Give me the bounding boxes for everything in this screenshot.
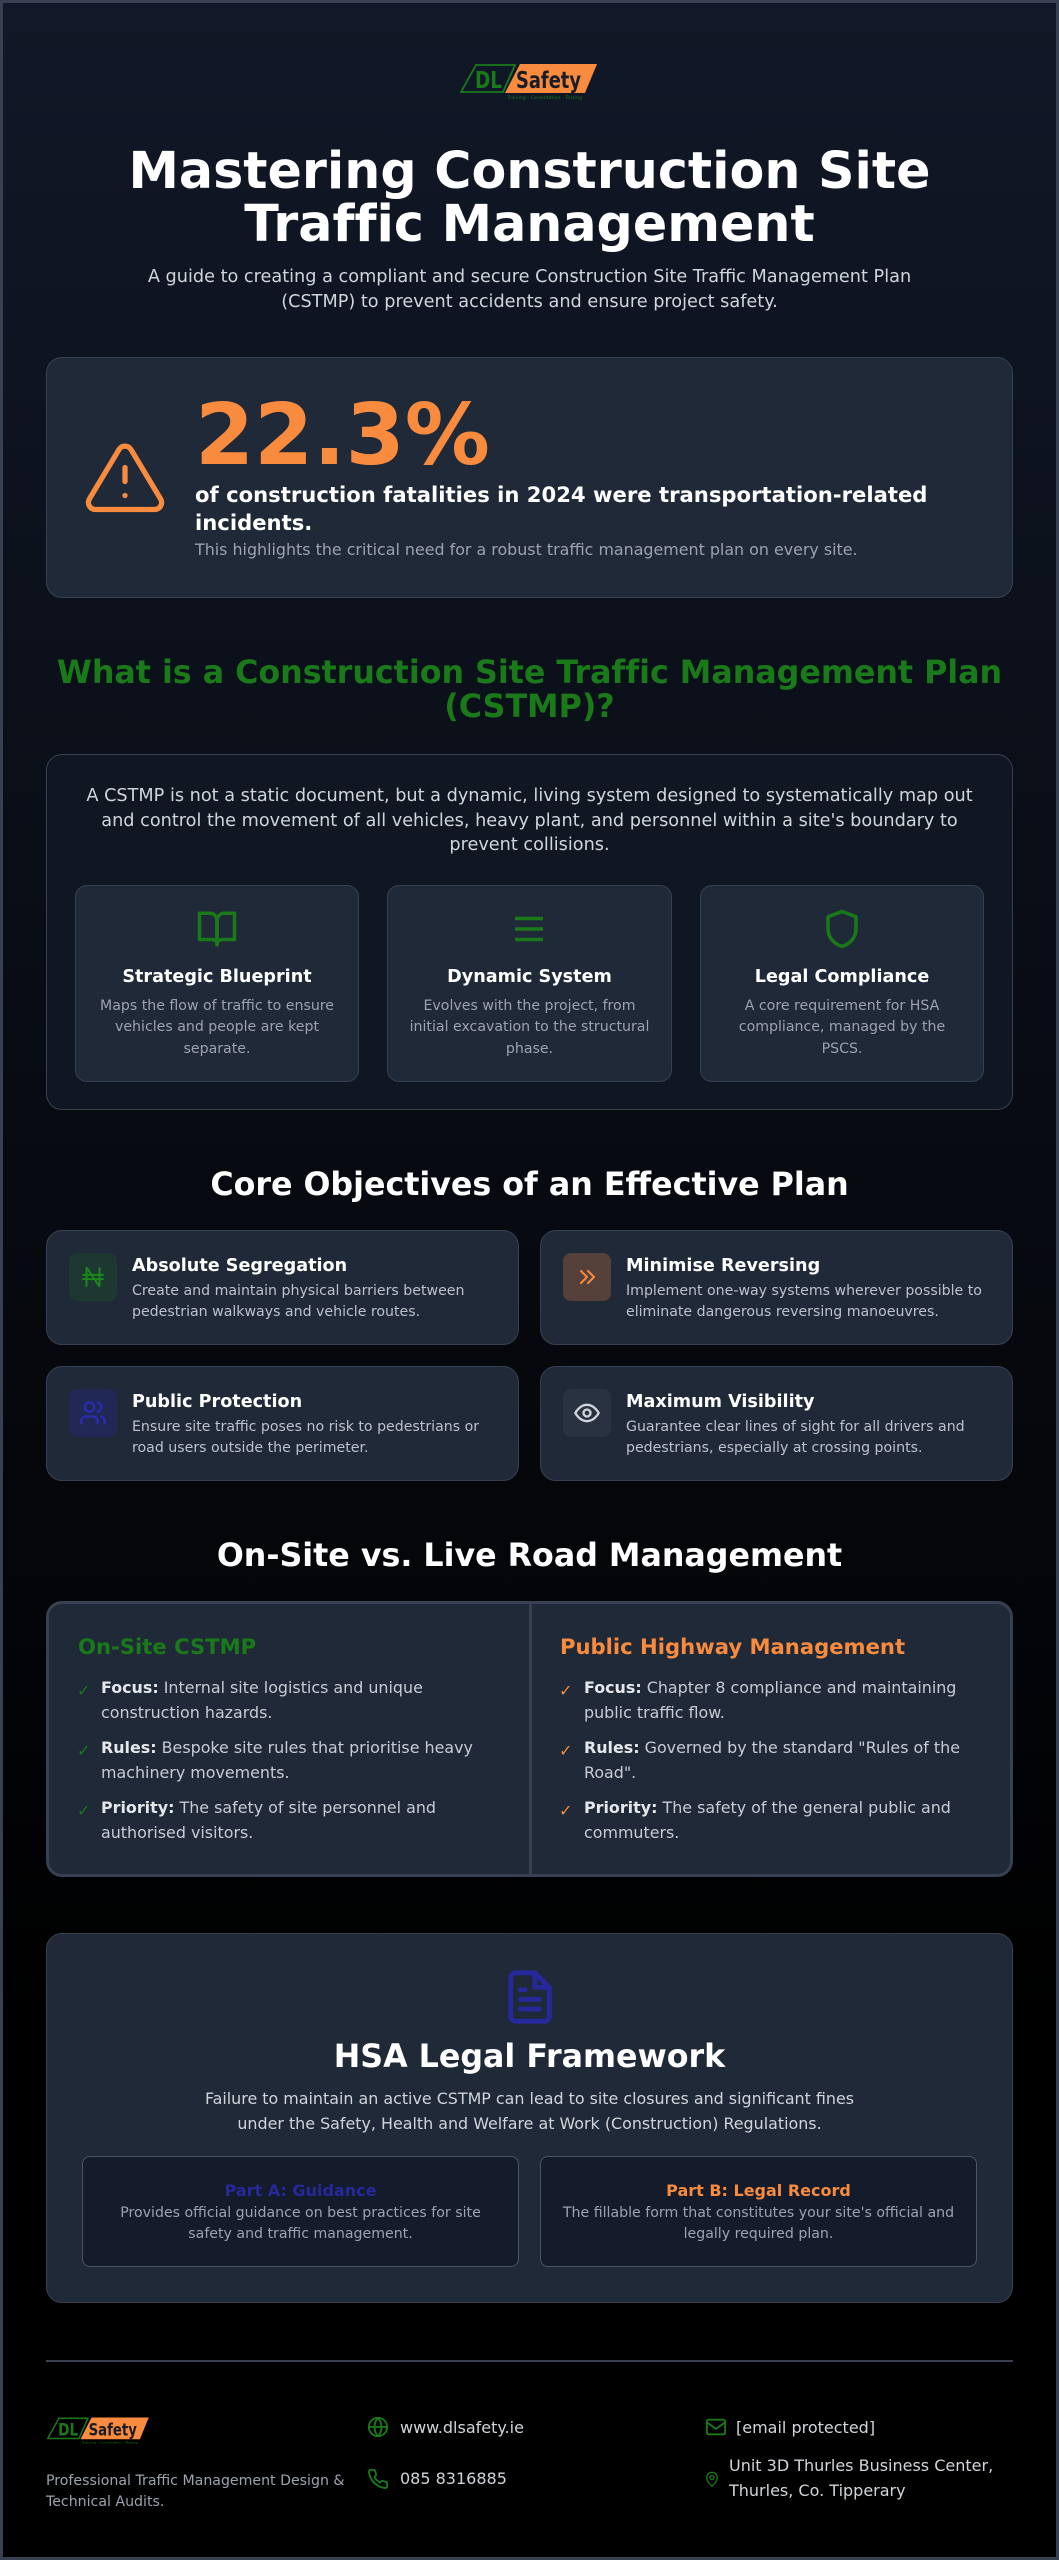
title: Part A: Guidance — [225, 2181, 376, 2200]
heading: HSA Legal Framework — [334, 2039, 725, 2075]
description — [626, 1283, 982, 1320]
list item: focus: public traffic flow. — [584, 1703, 725, 1722]
description: initial excavation to the structural — [410, 1019, 649, 1035]
check: ✓ — [77, 1801, 90, 1820]
list item: focus — [101, 1678, 423, 1722]
definition text: and control the movement of all vehicles, heavy plant, and personnel within a site's boundary to — [101, 811, 958, 831]
description: safety and traffic management. — [188, 2226, 413, 2242]
footer tagline — [46, 2473, 344, 2510]
icon: globe — [368, 2416, 388, 2438]
column divider — [529, 1604, 532, 1874]
icon: lines — [515, 916, 543, 942]
text: Failure to maintain an active CSTMP can lead to site closures and significant fines — [205, 2089, 854, 2108]
list item: rules: machinery movements. — [101, 1763, 290, 1782]
card: strategic blueprint — [75, 885, 359, 1082]
heading: what is a CSTMP — [57, 655, 1002, 725]
logo: footer: Safety — [89, 2420, 137, 2441]
description — [132, 1283, 464, 1320]
list item: rules: Rules: Governed by the standard "Rules of the — [584, 1738, 960, 1757]
description — [120, 2205, 481, 2242]
description: vehicles and people are kept — [115, 1019, 319, 1035]
card: public protection — [46, 1366, 519, 1481]
text: under the Safety, Health and Welfare at Work (Construction) Regulations. — [237, 2114, 822, 2133]
logo: footer: DL — [58, 2420, 78, 2441]
definition text: prevent collisions. — [449, 835, 610, 855]
statistic note: This highlights the critical need for a robust traffic management plan on every site. — [195, 540, 858, 559]
logo: header: Training · Consultation · Testing — [506, 95, 583, 100]
list item: priority: commuters. — [584, 1823, 679, 1842]
card: legal compliance — [700, 885, 984, 1082]
description: Evolves with the project, from — [424, 998, 636, 1014]
list item: rules: Rules: Bespoke site rules that prioritise heavy — [101, 1738, 473, 1757]
description: Implement one-way systems wherever possible to — [626, 1283, 982, 1299]
list item: rules: Road". — [584, 1763, 636, 1782]
card: maximum visibility — [540, 1366, 1013, 1481]
description — [739, 998, 945, 1057]
description — [562, 2205, 954, 2242]
column title: public highway: Public Highway Management — [560, 1634, 905, 1659]
description: compliance, managed by the — [739, 1019, 945, 1035]
description: pedestrians, especially at crossing points. — [626, 1440, 922, 1456]
title: Minimise Reversing — [626, 1256, 820, 1276]
description: Provides official guidance on best practices for site — [120, 2205, 481, 2221]
column title: on-site: On-Site CSTMP — [78, 1634, 256, 1659]
definition text: A CSTMP is not a static document, but a dynamic, living system designed to systematically map out — [86, 786, 973, 806]
description — [410, 998, 649, 1057]
icon: shield — [826, 910, 858, 948]
description: Create and maintain physical barriers between — [132, 1283, 464, 1299]
check: ✓ — [77, 1741, 90, 1760]
check: ✓ — [559, 1741, 572, 1760]
card: part A — [82, 2156, 519, 2267]
list item: focus: Focus: Internal site logistics and unique — [101, 1678, 423, 1697]
description: legally required plan. — [684, 2226, 833, 2242]
statistic: 22.3%: 22.3% — [195, 386, 490, 485]
icon: people — [69, 1389, 117, 1437]
title: Legal Compliance — [755, 967, 929, 987]
title: Traffic Management — [244, 194, 815, 253]
footer tagline: Technical Audits. — [46, 2494, 164, 2510]
icon: phone — [368, 2468, 388, 2489]
description — [626, 1419, 965, 1456]
card: minimise reversing — [540, 1230, 1013, 1345]
list item: rules — [101, 1738, 473, 1782]
definition text — [86, 786, 973, 855]
phone number: 085 8316885 — [400, 2469, 507, 2488]
description: road users outside the perimeter. — [132, 1440, 368, 1456]
text — [205, 2089, 854, 2133]
list item: focus: construction hazards. — [101, 1703, 272, 1722]
title: Absolute Segregation — [132, 1256, 347, 1276]
icon: eye — [563, 1389, 611, 1437]
statistic description: of construction fatalities in 2024 were transportation-related — [195, 482, 927, 507]
description — [132, 1419, 480, 1456]
panel: comparison — [46, 1601, 1013, 1877]
description: Ensure site traffic poses no risk to pedestrians or — [132, 1419, 479, 1435]
check: ✓ — [77, 1681, 90, 1700]
logo: header: DL — [475, 68, 502, 94]
description: Maps the flow of traffic to ensure — [100, 998, 334, 1014]
list item: focus — [584, 1678, 956, 1722]
panel: key statistic — [46, 357, 1013, 598]
list item: priority: Priority: The safety of site personnel and — [101, 1798, 436, 1817]
icon: segregation — [69, 1253, 117, 1301]
description: pedestrian walkways and vehicle routes. — [132, 1304, 420, 1320]
panel: HSA legal framework — [46, 1933, 1013, 2303]
list item: priority — [584, 1798, 951, 1842]
website: www.dlsafety.ie — [400, 2418, 524, 2437]
list item: focus: Focus: Chapter 8 compliance and maintaining — [584, 1678, 956, 1697]
subtitle — [148, 267, 911, 312]
title: Dynamic System — [447, 967, 612, 987]
card: part B — [540, 2156, 977, 2267]
heading: core objectives: Core Objectives of an Effective Plan — [210, 1167, 849, 1203]
address: Unit 3D Thurles Business Center, — [729, 2456, 993, 2475]
icon: document — [508, 1970, 552, 2024]
logo: header: Safety — [516, 68, 581, 94]
list item: priority: Priority: The safety of the general public and — [584, 1798, 951, 1817]
address: Thurles, Co. Tipperary — [729, 2481, 906, 2500]
icon: warning triangle — [86, 444, 164, 512]
address — [728, 2456, 993, 2500]
panel: definition — [46, 754, 1013, 1110]
card: absolute segregation — [46, 1230, 519, 1345]
check: ✓ — [559, 1801, 572, 1820]
description: A core requirement for HSA — [745, 998, 939, 1014]
title: Part B: Legal Record — [666, 2181, 851, 2200]
check: ✓ — [559, 1681, 572, 1700]
subtitle: (CSTMP) to prevent accidents and ensure project safety. — [281, 292, 778, 312]
icon: map pin — [706, 2472, 718, 2487]
subtitle: A guide to creating a compliant and secure Construction Site Traffic Management Plan — [148, 267, 911, 287]
description: separate. — [184, 1041, 250, 1057]
description — [100, 998, 334, 1057]
logo: footer: Training · Consultation · Testing — [81, 2441, 138, 2445]
icon: envelope — [706, 2418, 726, 2436]
title: Maximum Visibility — [626, 1392, 814, 1412]
description: eliminate dangerous reversing manoeuvres. — [626, 1304, 939, 1320]
description: PSCS. — [822, 1041, 862, 1057]
title: Public Protection — [132, 1392, 302, 1412]
footer tagline: Professional Traffic Management Design & — [46, 2473, 344, 2489]
statistic description: incidents. — [195, 510, 312, 535]
list item: priority — [101, 1798, 436, 1842]
heading: what is a CSTMP: (CSTMP)? — [444, 689, 615, 725]
list item: priority: authorised visitors. — [101, 1823, 253, 1842]
icon: book — [198, 912, 236, 946]
logo: footer — [47, 2418, 149, 2445]
icon: chevrons — [563, 1253, 611, 1301]
email: [email protected] — [736, 2418, 875, 2437]
description: Guarantee clear lines of sight for all drivers and — [626, 1419, 965, 1435]
logo: header — [460, 64, 597, 100]
statistic description — [195, 482, 927, 535]
card: dynamic system — [387, 885, 672, 1082]
description: The fillable form that constitutes your site's official and — [563, 2205, 954, 2221]
list item: rules — [584, 1738, 960, 1782]
description: phase. — [506, 1041, 553, 1057]
title: Mastering Construction Site — [128, 141, 931, 200]
heading: what is a CSTMP: What is a Construction Site Traffic Management Plan — [57, 655, 1002, 691]
heading: on-site vs live road: On-Site vs. Live Road Management — [217, 1538, 842, 1574]
title: Strategic Blueprint — [122, 967, 312, 987]
title — [128, 141, 931, 253]
